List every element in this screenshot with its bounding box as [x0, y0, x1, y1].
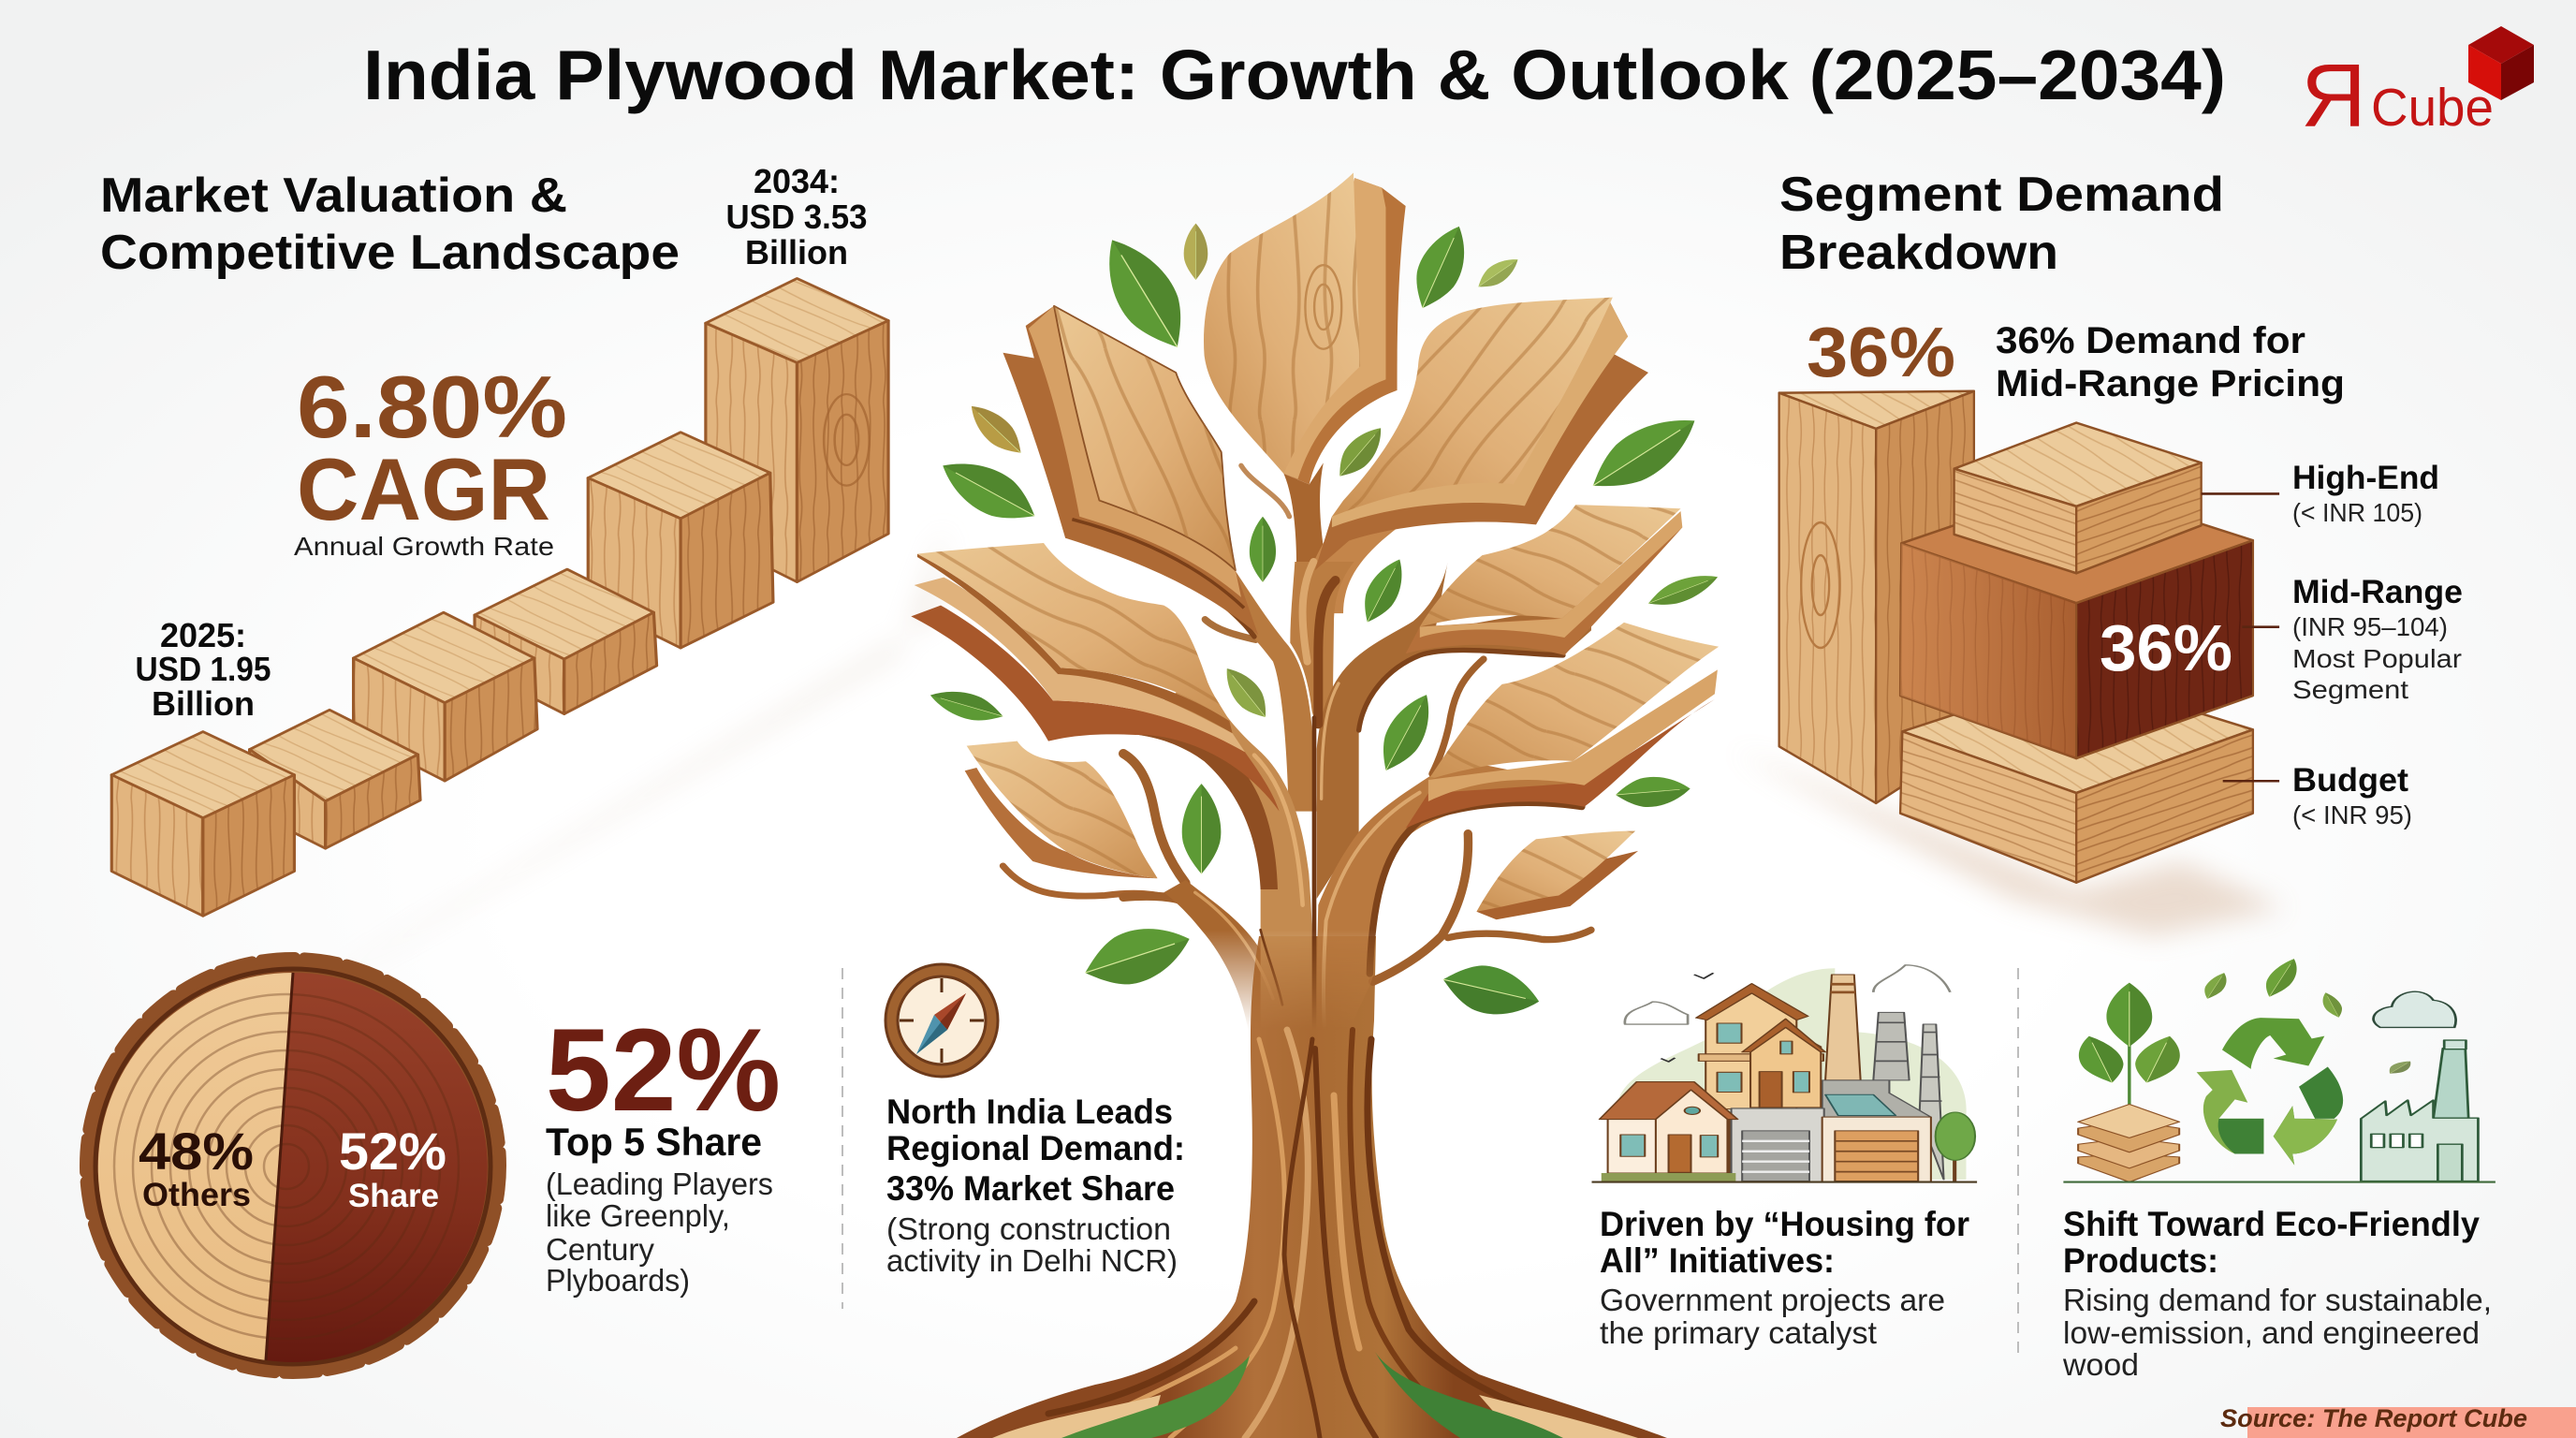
- illustration: houses and factory: [1592, 965, 1977, 1182]
- bar chart: wooden blocks: [111, 278, 888, 916]
- chart shadow: [197, 524, 945, 1058]
- logo wordmark: Cube: [2371, 78, 2494, 138]
- twigs: [1123, 620, 1591, 981]
- high-end block: [1954, 423, 2202, 573]
- panel: top 5 share: [85, 958, 781, 1373]
- tree upper stems and twigs: [1003, 462, 1406, 901]
- illustration: plant, recycling and factory: [2063, 957, 2496, 1182]
- heading: segment demand: Segment Demand: [1779, 168, 2224, 222]
- panel: central plywood tree: [911, 172, 1722, 1438]
- block 4: [475, 569, 657, 714]
- sheet: middle left: [911, 543, 1280, 812]
- sheet: upper left: [1003, 306, 1258, 635]
- label: mid-range: (INR 95–104): [2292, 612, 2448, 641]
- text: top 5 share: [546, 1120, 773, 1298]
- block 2: [250, 710, 420, 848]
- block 5: [588, 433, 773, 648]
- slice: share 52 percent: [266, 973, 488, 1362]
- stat: 52 percent: 52%: [546, 1005, 781, 1136]
- heading: segment demand: [1779, 168, 2224, 280]
- tall block: [1779, 391, 1974, 803]
- chart: tree-ring pie: Others: [142, 1177, 251, 1213]
- logo wordmark: [2301, 46, 2494, 146]
- mid-range block: [1900, 484, 2253, 758]
- text: north india: North India Leads: [886, 1093, 1173, 1131]
- heading: market valuation: [100, 169, 680, 280]
- small floating leaves: [2199, 957, 2417, 1077]
- text: top 5 share: like Greenply,: [546, 1198, 730, 1233]
- logo: RCube: [2301, 26, 2534, 146]
- callout: demand for mid-range pricing: Mid-Range Pricing: [1996, 363, 2345, 404]
- panel: segment demand breakdown: [1732, 168, 2463, 936]
- label: 2025 value: USD 1.95: [135, 650, 271, 688]
- tree trunk: [957, 936, 1667, 1438]
- label: mid-range: Most Popular: [2292, 644, 2462, 673]
- text: top 5 share: (Leading Players: [546, 1167, 773, 1201]
- label: budget: [2292, 762, 2412, 829]
- block 2025: [111, 732, 294, 916]
- label: 2025 value: [135, 616, 271, 723]
- limb: centre stem: [1290, 562, 1354, 727]
- stat: CAGR: 6.80%: [297, 358, 567, 456]
- title: India Plywood Market: Growth & Outlook (2025–2034): [363, 36, 2226, 114]
- text: housing for all: the primary catalyst: [1600, 1315, 1877, 1350]
- label: mid-range: [2292, 574, 2463, 704]
- label: mid-range: Segment: [2292, 675, 2408, 704]
- label: high-end: High-End: [2292, 460, 2439, 496]
- text: north india: 33% Market Share: [886, 1169, 1175, 1208]
- sheet: top centre: [1204, 172, 1406, 484]
- stat: CAGR: Annual Growth Rate: [294, 532, 554, 561]
- icon: cloud: [2374, 991, 2456, 1027]
- callout: demand for mid-range pricing: 36% Demand for: [1996, 320, 2305, 361]
- block 3: [354, 612, 537, 781]
- text: housing for all: [1600, 1205, 1969, 1350]
- icon: green factory: [2361, 1040, 2478, 1181]
- chart: tree-ring pie: 52%: [339, 1122, 446, 1181]
- panel: eco-friendly products: [2062, 957, 2496, 1382]
- tree canopy: plywood sheets: [1003, 172, 1719, 919]
- text: eco-friendly: wood: [2062, 1347, 2139, 1382]
- text: housing for all: All” Initiatives:: [1600, 1241, 1835, 1280]
- stat: CAGR: CAGR: [297, 440, 550, 538]
- icon: recycling arrows: [2197, 1018, 2343, 1165]
- text: top 5 share: Plyboards): [546, 1263, 690, 1298]
- ground line: [2063, 1180, 2496, 1185]
- limb: lower left: [1164, 884, 1260, 1026]
- panel: market valuation and competitive landscape: [100, 162, 945, 1058]
- tree canopy: left sheets: [911, 543, 1280, 878]
- chart: tree-ring pie: Share: [348, 1178, 439, 1214]
- chart: tree-ring pie: [85, 958, 501, 1373]
- stat: 36 percent: 36%: [1807, 313, 1955, 391]
- soil and grass at roots: [992, 1352, 1638, 1438]
- label: high-end: [2292, 460, 2439, 527]
- panel: north india regional demand: [886, 964, 1185, 1278]
- text: north india: [886, 1093, 1185, 1278]
- text: eco-friendly: low-emission, and engineered: [2063, 1315, 2480, 1350]
- text: eco-friendly: Products:: [2063, 1241, 2218, 1280]
- limb: to lower right sheet: [1316, 766, 1574, 985]
- text: top 5 share: Top 5 Share: [546, 1120, 762, 1164]
- text: housing for all: Government projects are: [1600, 1283, 1945, 1317]
- icon: seedling on plywood stack: [2069, 983, 2190, 1182]
- limb: to middle left sheet: [1130, 693, 1312, 1008]
- text: housing for all: Driven by “Housing for: [1600, 1205, 1969, 1243]
- heading: market valuation: Market Valuation &: [100, 169, 567, 223]
- text: north india: (Strong construction: [886, 1211, 1171, 1246]
- callout: demand for mid-range pricing: [1996, 320, 2345, 404]
- source text: Source: The Report Cube: [2220, 1404, 2527, 1432]
- chart: tree-ring pie: 48%: [139, 1122, 254, 1181]
- label: 2034 value: Billion: [745, 233, 848, 271]
- budget block: [1900, 675, 2253, 883]
- text: eco-friendly: [2062, 1205, 2492, 1382]
- sheet: upper right: [1315, 298, 1648, 570]
- icon: compass: [886, 964, 998, 1077]
- leader lines: [2202, 493, 2279, 781]
- source bar: [2247, 1407, 2576, 1438]
- label: 2025 value: 2025:: [160, 616, 246, 654]
- heading: market valuation: Competitive Landscape: [100, 226, 680, 280]
- limb: to upper left sheet: [1142, 562, 1317, 812]
- label: budget: (< INR 95): [2292, 800, 2412, 829]
- stat: CAGR: [294, 358, 567, 561]
- label: budget: Budget: [2292, 762, 2408, 799]
- heading: segment demand: Breakdown: [1779, 226, 2058, 280]
- label: mid-range: Mid-Range: [2292, 574, 2463, 610]
- sheet: middle right: [1406, 505, 1682, 655]
- label: 2034 value: [726, 162, 867, 271]
- stack shadow: [1732, 749, 2284, 936]
- wooden block stack: [1779, 391, 2279, 883]
- label: high-end: (< INR 105): [2292, 498, 2422, 527]
- logo mark: red cube: [2468, 26, 2534, 100]
- stat on block: 36 percent: 36%: [2100, 611, 2232, 684]
- sheet: lower right: [1406, 623, 1719, 829]
- lower tree leaves: [1077, 915, 1544, 1024]
- limbs fading into the trunk: [1123, 562, 1591, 1030]
- trunk strands: [1048, 1030, 1591, 1438]
- slice: others 48 percent: [98, 973, 293, 1360]
- panel: housing for all: [1592, 965, 1977, 1350]
- text: north india: Regional Demand:: [886, 1129, 1185, 1167]
- sheet: small right: [1476, 831, 1638, 919]
- label: 2025 value: Billion: [152, 684, 255, 723]
- limb strands: [1193, 558, 1586, 1020]
- limb: to middle right sheet: [1317, 562, 1591, 899]
- block 2034: [706, 278, 888, 582]
- text: eco-friendly: Rising demand for sustainable,: [2063, 1283, 2492, 1317]
- label: 2034 value: 2034:: [754, 162, 840, 200]
- text: north india: activity in Delhi NCR): [886, 1243, 1178, 1278]
- sheet: lower left: [965, 741, 1158, 878]
- text: eco-friendly: Shift Toward Eco-Friendly: [2063, 1205, 2480, 1243]
- tree limbs: [1123, 562, 1591, 1030]
- tree leaves: [927, 219, 1722, 874]
- logo wordmark: Я: [2301, 46, 2366, 146]
- text: top 5 share: Century: [546, 1232, 654, 1267]
- label: 2034 value: USD 3.53: [726, 198, 867, 236]
